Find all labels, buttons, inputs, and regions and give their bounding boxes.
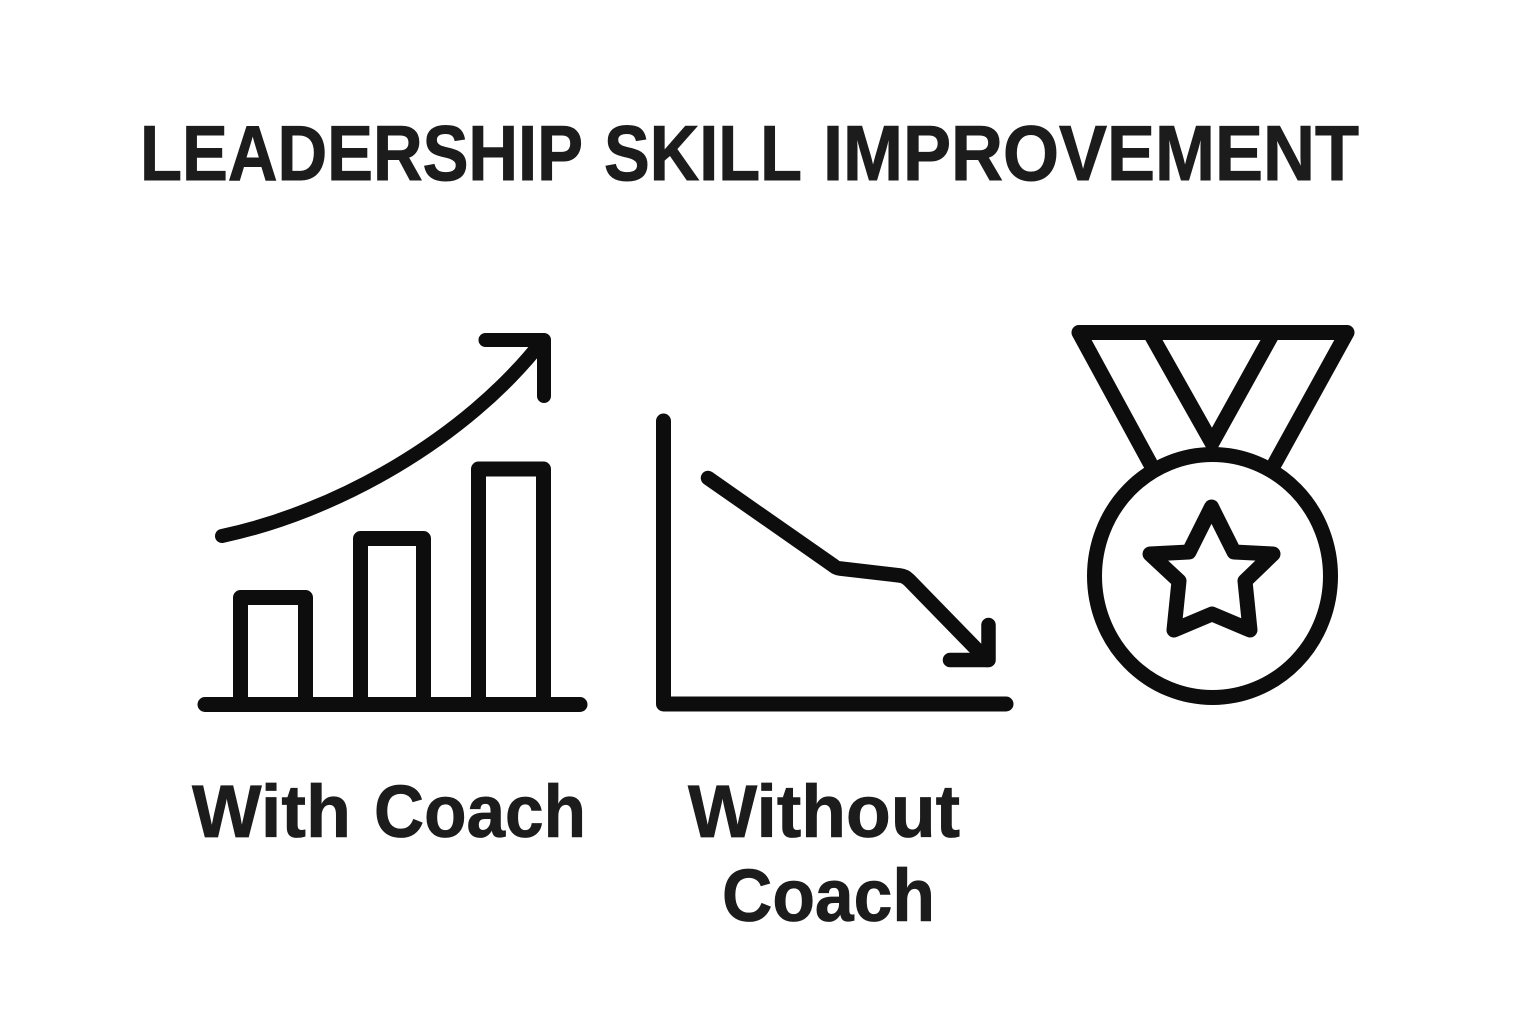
icon: bar chart with rising arrow [205,340,580,704]
baseline [205,697,580,712]
axes [664,421,1006,704]
icon: declining line chart [664,421,1006,704]
label: without coach [688,770,960,937]
label: without coach: Without [688,770,960,853]
icon: medal with star [1079,332,1347,698]
rising arrow [222,340,544,536]
bar: short [240,598,306,704]
label: without coach: Coach [722,854,935,937]
title [140,109,1359,197]
title: IMPROVEMENT [823,109,1359,197]
medal disc [1094,454,1330,698]
label: with coach: Coach [374,770,586,853]
title: LEADERSHIP [140,109,583,197]
falling arrow [708,478,988,660]
label: with coach [192,770,586,853]
star [1150,507,1273,630]
label: with coach: With [192,770,351,853]
bar: tall [478,469,544,704]
title: SKILL [604,109,802,197]
ribbon [1079,332,1347,463]
bar: medium [360,538,424,704]
